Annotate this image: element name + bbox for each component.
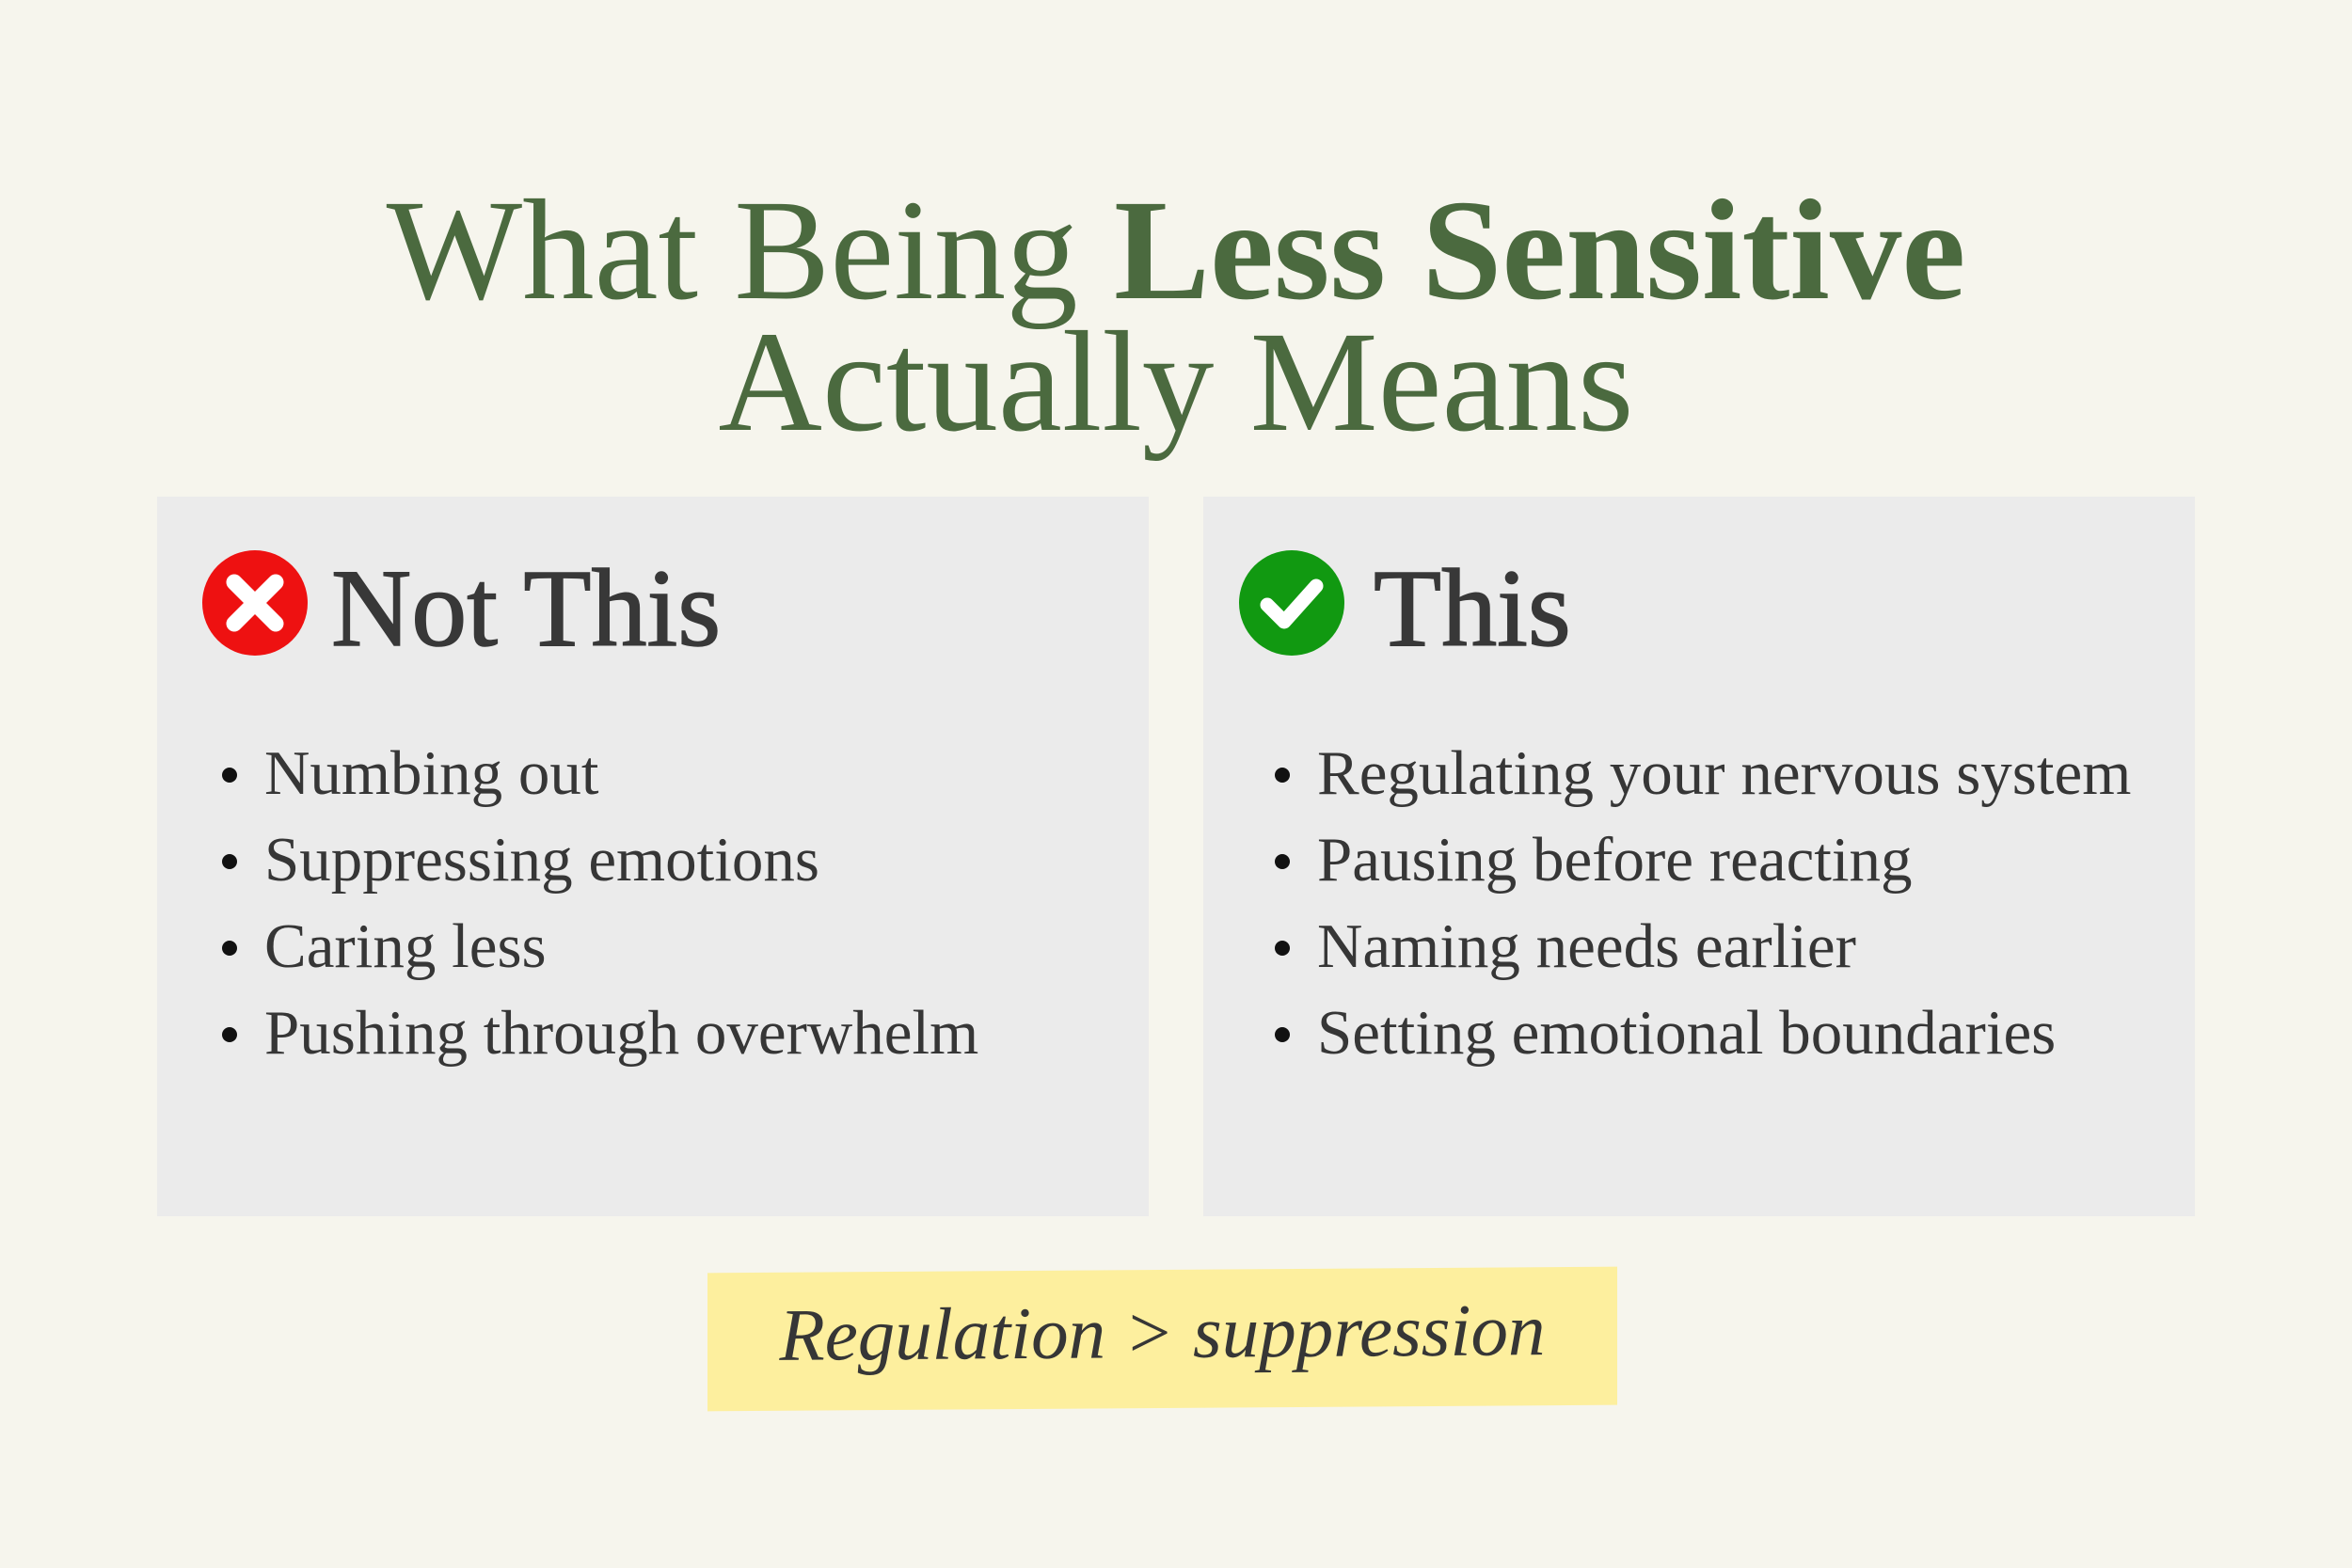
list: this: Naming needs earlier	[1317, 911, 1856, 981]
heading: this: This	[1374, 546, 1571, 670]
callout: highlight: Regulation > suppression	[779, 1290, 1546, 1377]
list: not this: Pushing through overwhelm	[264, 998, 978, 1068]
panel: this	[1203, 497, 2195, 1216]
title: What Being Less Sensitive	[387, 171, 1965, 330]
title	[386, 171, 1965, 462]
list: this	[1275, 738, 2131, 1068]
list: this: Setting emotional boundaries	[1317, 998, 2056, 1068]
panel: not this	[157, 497, 1149, 1216]
list: not this	[222, 738, 978, 1068]
title: Actually Means	[719, 303, 1633, 462]
list: this: Regulating your nervous system	[1317, 738, 2131, 808]
callout: highlight	[707, 1267, 1617, 1411]
list: not this: Caring less	[264, 911, 547, 981]
list: not this: Numbing out	[264, 738, 598, 808]
list: this: Pausing before reacting	[1317, 825, 1913, 895]
heading: not this: Not This	[331, 546, 721, 670]
icon: green check	[1239, 550, 1344, 656]
icon: red x	[202, 550, 308, 656]
list: not this: Suppressing emotions	[264, 825, 819, 895]
